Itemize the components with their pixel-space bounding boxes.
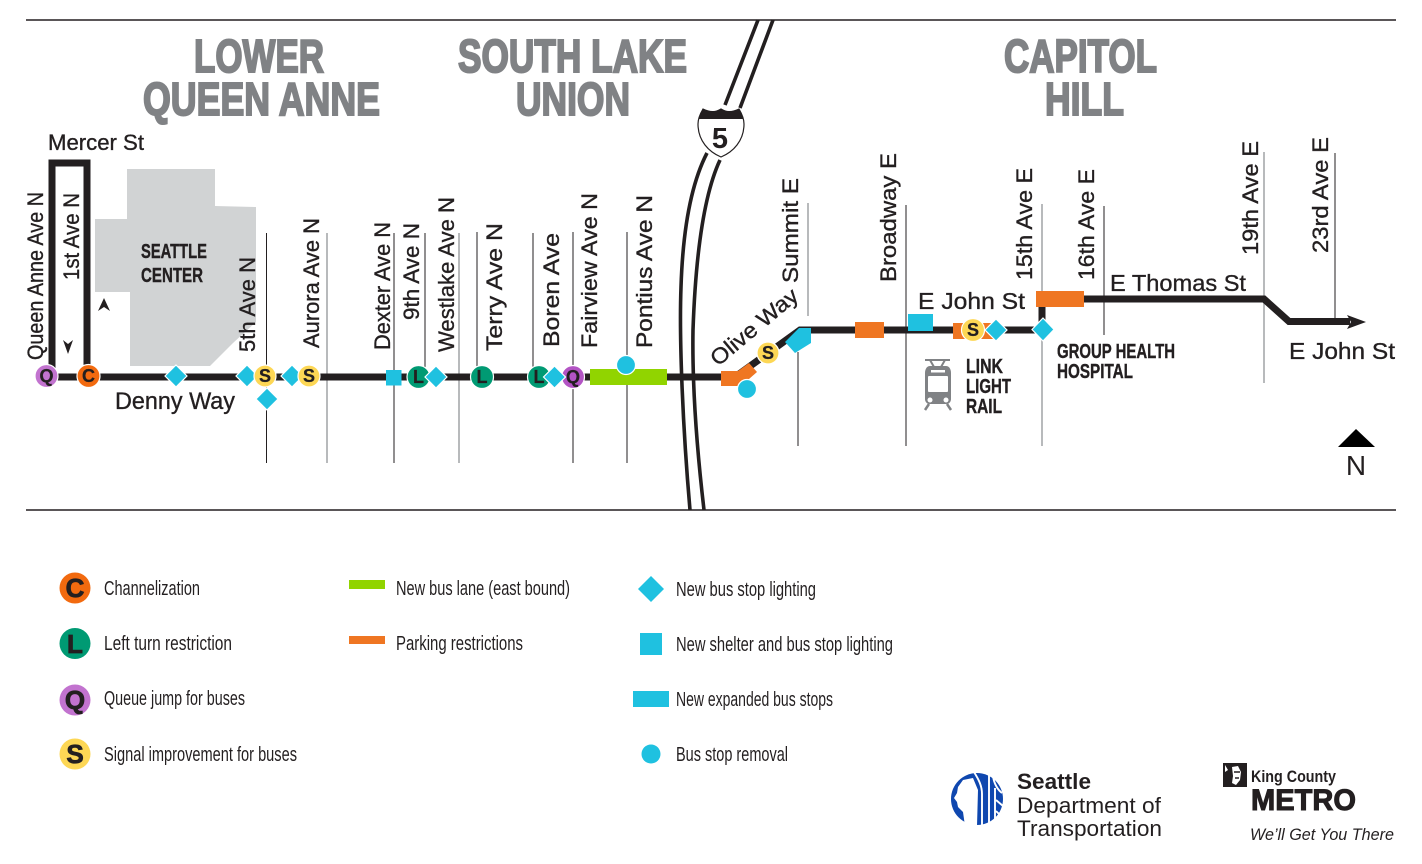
markers: Left turn restriction: L [476,367,488,387]
Interstate 5 highway [680,20,773,510]
label: Group Health Hospital [1057,341,1175,383]
legend item: Left turn restriction [60,628,232,659]
street labels: E John St [918,288,1026,314]
street labels: 23rd Ave E [1308,137,1333,253]
heading: South Lake Union [458,30,687,125]
street labels: Mercer St [48,130,144,155]
heading: Lower Queen Anne: LOWER [194,30,324,82]
legend item: Queue jump: Q [65,685,85,715]
legend item: New bus lane: New bus lane (east bound) [396,578,570,600]
logo: King County Metro: King County [1251,767,1336,786]
street labels: Fairview Ave N [577,193,602,348]
legend item: Left turn restriction: Left turn restriction [104,633,232,655]
cross street lines [266,152,1335,463]
legend item: New bus stop lighting [638,576,816,602]
street labels [23,130,1396,415]
lighting diamonds over markers [425,319,1007,388]
street labels: 9th Ave N [399,223,424,320]
logo: Seattle Department of Transportation: Department of [1017,793,1162,818]
route arrowhead [1347,315,1366,329]
street labels: 15th Ave E [1012,168,1037,280]
legend item: Queue jump [60,684,245,716]
icon: King County portrait [1223,763,1247,787]
icon: north arrow: N [1346,450,1366,481]
legend item: Parking restrictions: Parking restrictions [396,633,523,655]
bus stop removal circles [616,356,756,398]
street labels: Broadway E [876,153,901,282]
street labels: 5th Ave N [235,257,260,352]
legend item: New bus lane [349,578,570,600]
legend item: Left turn restriction: L [67,629,83,659]
marker: Channelization [77,364,100,388]
street labels: Dexter Ave N [370,222,395,350]
label: Link Light Rail [966,356,1011,418]
Seattle Center block: SEATTLE [141,241,207,263]
heading: Lower Queen Anne: QUEEN ANNE [143,73,380,125]
legend item: Parking restrictions [349,633,523,655]
markers: Queue jump: Q [39,366,54,386]
Mercer St and 1st Ave loop [52,163,87,377]
legend item: New shelter and bus stop lighting: New shelter and bus stop lighting [676,634,893,656]
logo: Seattle Department of Transportation: Transportation [1017,816,1162,841]
legend item: New shelter and bus stop lighting [640,633,893,656]
street labels: 1st Ave N [59,193,84,280]
logo: King County Metro: METRO [1251,784,1356,817]
street labels: Aurora Ave N [299,218,324,348]
street labels: Summit E [778,178,803,283]
label: Link Light Rail: LIGHT [966,376,1011,398]
parking restriction segments [721,291,1084,386]
legend item: Queue jump: Queue jump for buses [104,688,245,710]
direction arrow: southbound [63,340,73,354]
street labels: Terry Ave N [482,223,507,351]
marker: Channelization: C [82,366,95,386]
icon: I-5 shield: 5 [712,123,728,155]
street labels: Pontius Ave N [632,195,657,348]
label: Group Health Hospital: HOSPITAL [1057,361,1133,383]
street labels: Queen Anne Ave N [23,192,48,360]
label: Link Light Rail: RAIL [966,396,1002,418]
new expanded and shelter stops [386,314,933,386]
street labels: E Thomas St [1110,270,1247,296]
street labels: 16th Ave E [1074,169,1099,280]
bus stop lighting diamonds [165,318,1054,410]
icon: Link Light Rail train [925,360,951,410]
markers: Left turn restriction [407,366,550,388]
legend item: New bus stop lighting: New bus stop lighting [676,579,816,601]
street labels: 19th Ave E [1238,141,1263,255]
logo: King County Metro: We’ll Get You There [1250,825,1394,844]
legend item: Bus stop removal: Bus stop removal [676,744,788,766]
markers: Left turn restriction: L [413,367,424,387]
street labels: Olive Way [705,283,803,371]
marker letters: S: S [762,343,774,363]
heading: Capitol Hill: HILL [1045,73,1124,125]
logo: Seattle Department of Transportation [951,769,1162,841]
Seattle Center block: CENTER [141,265,203,287]
Seattle Center block [95,169,256,366]
label: Link Light Rail: LINK [966,356,1003,378]
markers: Queue jump [35,364,584,388]
label: Group Health Hospital: GROUP HEALTH [1057,341,1175,363]
marker letters: S [259,320,979,386]
legend item: Channelization [60,572,200,604]
markers: Queue jump: Q [566,367,580,387]
logo: King County Metro [1223,763,1394,844]
street labels: Boren Ave [539,233,564,347]
heading: Capitol Hill: CAPITOL [1004,30,1157,82]
legend item: New expanded bus stops: New expanded bus stops [676,689,833,711]
heading: Lower Queen Anne [143,30,380,125]
legend item: Signal improvement: S [66,739,84,769]
legend item: New expanded bus stops [633,689,833,711]
direction arrow: northbound [98,298,110,311]
street labels: Denny Way [115,388,235,415]
legend item: Channelization: C [66,573,85,603]
icon: Seattle seal [951,772,1003,826]
logo: Seattle Department of Transportation: Seattle [1017,769,1091,794]
legend item: Signal improvement: Signal improvement for buses [104,744,297,766]
legend: treatment markers [60,572,297,770]
heading: South Lake Union: SOUTH LAKE [458,30,687,82]
legend: lane treatments [349,578,570,655]
marker letters: S: S [259,366,271,386]
legend item: Channelization: Channelization [104,578,200,600]
heading: Capitol Hill [1004,30,1157,125]
icon: I-5 shield [698,109,744,157]
marker letters: S: S [967,320,979,340]
legend: bus stop treatments [633,576,893,766]
legend item: Bus stop removal [642,744,788,766]
street labels: Westlake Ave N [434,197,459,352]
icon: north arrow [1338,429,1375,481]
transit corridor route line [46,299,1350,377]
bus lane segment [590,369,667,385]
markers: Left turn restriction: L [534,367,544,387]
marker letters: S: S [303,366,315,386]
street labels: E John St [1289,338,1396,364]
heading: South Lake Union: UNION [516,73,630,125]
markers: Signal improvement [254,318,984,387]
legend item: Signal improvement [60,738,297,770]
